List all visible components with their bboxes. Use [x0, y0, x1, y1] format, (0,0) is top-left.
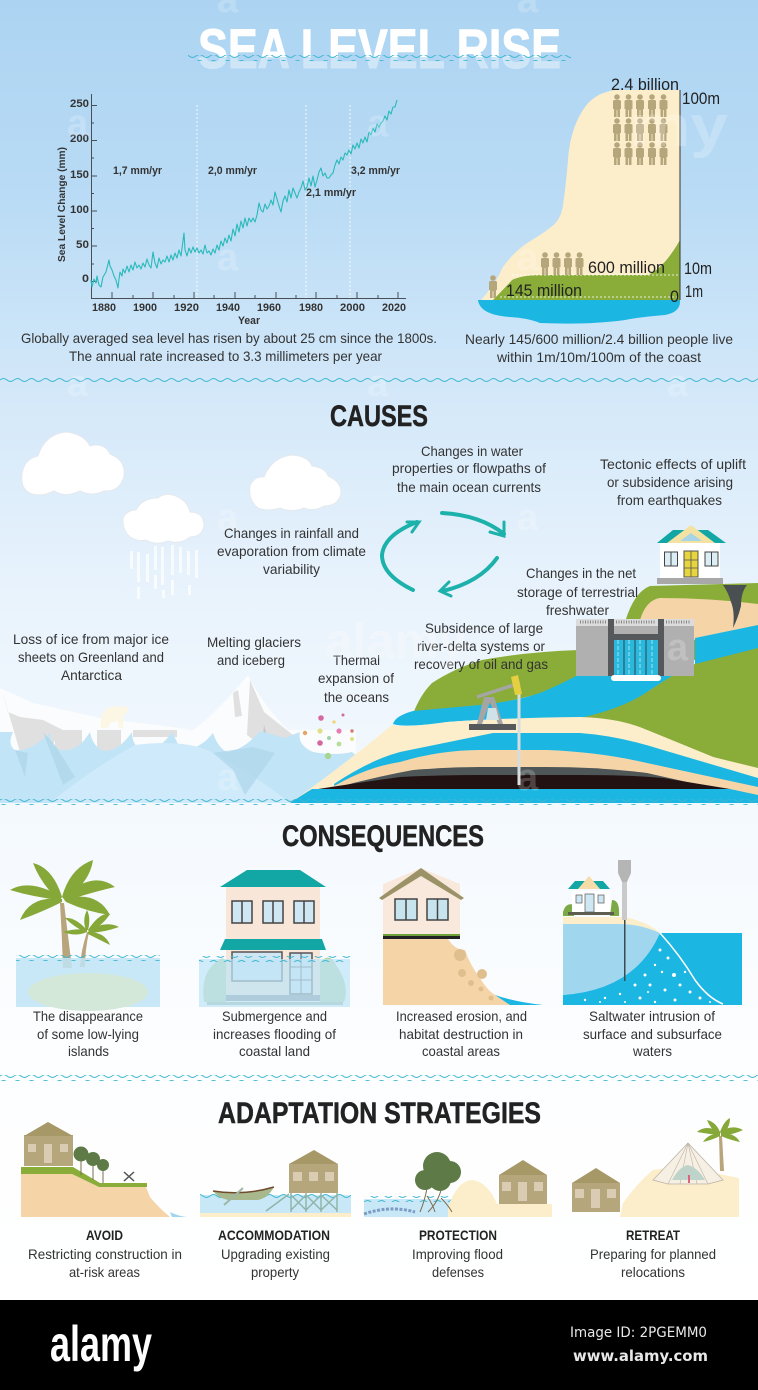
rate labels: 2,1 mm/yr [306, 187, 357, 199]
icon: palm trees [10, 860, 119, 968]
caption: saltwater: Saltwater intrusion of [589, 1008, 715, 1024]
grey ice faces [2, 680, 293, 754]
lower right land [580, 648, 758, 770]
population and height labels: 145 million [506, 281, 582, 300]
x axis labels: 1960 [257, 302, 281, 314]
y axis labels: 0 [82, 273, 89, 285]
rain [130, 545, 198, 599]
stilts [266, 1193, 337, 1212]
rate labels [113, 165, 401, 199]
title: SEA LEVEL RISE [198, 17, 561, 80]
y axis labels: 200 [70, 133, 89, 145]
thermal expansion particles [303, 714, 354, 759]
upper river [695, 625, 758, 668]
label: tectonic effects: from earthquakes [617, 492, 722, 508]
cloud 2 [123, 494, 204, 543]
label: glaciers [207, 634, 301, 668]
label: accommodation: Upgrading existing [221, 1246, 330, 1262]
watermarks: a [517, 237, 539, 279]
label: tectonic effects [600, 456, 746, 508]
y axis labels: 100 [70, 204, 89, 216]
caption: sea level: The annual rate increased to 3.3 millimeters per year [69, 348, 382, 364]
palm [719, 1136, 724, 1171]
label: protection: defenses [432, 1264, 484, 1280]
population and height labels: 100m [682, 89, 720, 108]
label: subsidence: Subsidence of large [425, 620, 543, 636]
population and height labels: 2.4 billion [611, 75, 679, 94]
earthquake crack [723, 585, 747, 628]
label: freshwater storage: Changes in the net [526, 565, 636, 581]
footer bar [0, 1300, 758, 1390]
rate labels: 2,0 mm/yr [208, 165, 258, 177]
mangrove [415, 1152, 461, 1191]
watermarks: a [367, 103, 389, 145]
caption: coastal population [465, 331, 733, 365]
panel: avoid [21, 1122, 187, 1217]
caption: erosion [396, 1008, 527, 1059]
heading: consequences: CONSEQUENCES [282, 820, 484, 853]
x axis labels: 2000 [340, 302, 365, 314]
elevation lines [500, 275, 680, 297]
lighter water sheet [50, 743, 290, 803]
label: rainfall: evaporation from climate [217, 543, 366, 559]
y axis labels [56, 98, 89, 285]
people icons: 600 million [541, 252, 584, 275]
panel: retreat [562, 1118, 743, 1217]
dam [576, 619, 694, 681]
label: freshwater storage: freshwater [546, 602, 609, 618]
watermarks: a [517, 497, 539, 539]
boat [213, 1187, 274, 1200]
rate labels: 1,7 mm/yr [113, 165, 163, 177]
land 10m zone [493, 240, 680, 300]
x axis labels: 1880 [92, 302, 116, 314]
heading: causes: CAUSES [330, 400, 428, 433]
people icon: 145 million [489, 275, 497, 298]
water [478, 300, 680, 324]
caption: islands: of some low-lying [37, 1026, 139, 1042]
watermarks: a [667, 627, 689, 669]
small house [563, 876, 619, 916]
watermarks [67, 0, 728, 799]
caption: sea level: Globally averaged sea level has risen by about 25 cm since the 1800s. [21, 330, 437, 346]
caption: erosion: Increased erosion, and [396, 1008, 527, 1024]
ice shelf [0, 688, 187, 733]
caption: flooding: coastal land [239, 1043, 310, 1059]
submerged ice [15, 732, 275, 795]
hill sand [640, 598, 758, 640]
x axis labels: Year [238, 315, 261, 327]
upper hill [625, 583, 758, 660]
population and height labels: 1m [685, 282, 703, 301]
x mark [124, 1172, 134, 1181]
watermarks: a [217, 757, 239, 799]
label: protection [412, 1227, 503, 1280]
label: ice sheets: Loss of ice from major ice [13, 631, 169, 647]
mountain [187, 675, 293, 735]
caption: erosion: habitat destruction in [399, 1026, 523, 1042]
river [393, 664, 695, 726]
watermarks: my [630, 94, 728, 159]
reef rocks [364, 1209, 415, 1214]
label: tectonic effects: Tectonic effects of uplift [600, 456, 746, 472]
line chart: sea level change [56, 94, 406, 327]
panel: saltwater intrusion [563, 860, 742, 1005]
x axis labels: 1980 [299, 302, 323, 314]
trees [74, 1146, 109, 1171]
y axis labels: Sea Level Change (mm) [56, 147, 68, 262]
caption: islands: The disappearance [33, 1008, 143, 1024]
house on hill [657, 525, 726, 584]
panel: islands [10, 860, 160, 1011]
caption: coastal population: Nearly 145/600 million/2.4 billion people live [465, 331, 733, 347]
population and height labels: 600 million [588, 258, 665, 277]
rate labels: 3,2 mm/yr [351, 165, 401, 177]
label: protection: Improving flood [412, 1246, 503, 1262]
watermarks: alamy [325, 613, 467, 669]
label: protection: PROTECTION [419, 1227, 497, 1243]
y axis labels: 150 [70, 169, 89, 181]
label: ice sheets: Antarctica [61, 667, 122, 683]
label: avoid: Restricting construction in [28, 1246, 182, 1262]
label: subsidence [414, 620, 548, 672]
label: glaciers: Melting glaciers [207, 634, 301, 650]
label: retreat: RETREAT [626, 1227, 680, 1243]
label: rainfall: variability [263, 561, 320, 577]
sea level series [91, 100, 397, 288]
sea [0, 731, 362, 803]
label: ocean currents [392, 443, 546, 495]
cycle arrows: ocean currents [382, 513, 504, 596]
label: retreat [590, 1227, 716, 1280]
salt particles [584, 948, 711, 1003]
panel: accommodation [200, 1150, 351, 1217]
panel: erosion [379, 868, 543, 1005]
clouds and rain [22, 432, 341, 599]
label: avoid: at-risk areas [69, 1264, 140, 1280]
watermarks: a [367, 363, 389, 405]
caption: flooding [213, 1008, 336, 1059]
foam behind waves [4, 730, 356, 756]
heading: adaptation strategies: ADAPTATION STRATEGIES [218, 1097, 541, 1130]
x axis labels: 1940 [216, 302, 240, 314]
x axis labels: 2020 [382, 302, 406, 314]
beach [563, 917, 660, 933]
caption: islands [33, 1008, 143, 1059]
people icons: 2.4 billion [613, 94, 668, 165]
land 100m zone [481, 90, 680, 300]
label: avoid [28, 1227, 182, 1280]
label: accommodation [218, 1227, 330, 1280]
label: thermal expansion: expansion of [318, 670, 394, 686]
watermarks: a [217, 237, 239, 279]
population and height labels: 0 [670, 287, 679, 306]
freshwater lens [563, 924, 660, 995]
alamy logo: alamy [50, 1316, 152, 1372]
label: ice sheets: sheets on Greenland and [18, 649, 164, 665]
y axis labels: 50 [76, 239, 89, 251]
label: ocean currents: properties or flowpaths of [392, 460, 546, 476]
label: ocean currents: Changes in water [421, 443, 523, 459]
interface line [660, 933, 723, 1004]
coastal cross-section [290, 525, 758, 803]
watermarks: a [217, 497, 239, 539]
caption: saltwater: waters [632, 1043, 672, 1059]
label: retreat: Preparing for planned [590, 1246, 716, 1262]
label: avoid: AVOID [86, 1227, 123, 1243]
caption: saltwater [583, 1008, 722, 1059]
label: subsidence: recovery of oil and gas [414, 656, 548, 672]
y axis labels: 250 [70, 98, 89, 110]
population and height labels [506, 75, 720, 306]
tent [653, 1143, 723, 1184]
label: thermal expansion [318, 652, 394, 705]
label: tectonic effects: or subsidence arising [607, 474, 733, 490]
watermarks: a [667, 363, 689, 405]
label: thermal expansion: Thermal [333, 652, 380, 668]
label: rainfall [217, 525, 366, 577]
water [16, 958, 160, 1007]
label: ocean currents: the main ocean currents [397, 479, 541, 495]
upper storey [226, 887, 320, 995]
title [188, 28, 571, 69]
axes [91, 94, 406, 298]
caption: sea level [21, 330, 437, 364]
well [618, 860, 631, 981]
label: accommodation: ACCOMMODATION [218, 1227, 330, 1243]
label: rainfall: Changes in rainfall and [224, 525, 359, 541]
panel: protection [364, 1152, 552, 1217]
label: glaciers: and iceberg [217, 652, 285, 668]
cloud 3 [250, 455, 341, 510]
x axis labels [92, 302, 406, 327]
label: subsidence: river-delta systems or [417, 638, 545, 654]
caption: islands: islands [68, 1043, 109, 1059]
left green hill [413, 650, 578, 714]
panel: flooded house [199, 870, 350, 1007]
title: SEA LEVEL RISE [198, 17, 561, 80]
label: retreat: relocations [621, 1264, 685, 1280]
image id: Image ID: 2PGEMM0 [570, 1325, 707, 1341]
caption: coastal population: within 1m/10m/100m of the coast [496, 349, 701, 365]
coastal population diagram [478, 75, 720, 324]
label: accommodation: property [251, 1264, 299, 1280]
caption: flooding: Submergence and [222, 1008, 327, 1024]
label: thermal expansion: the oceans [324, 689, 389, 705]
saltwater [563, 933, 742, 1005]
label: freshwater storage [517, 565, 638, 618]
caption: flooding: increases flooding of [213, 1026, 336, 1042]
flood water [199, 959, 350, 1007]
watermarks: a [517, 757, 539, 799]
period dividers [197, 105, 350, 298]
population and height labels: 10m [684, 259, 712, 278]
label: freshwater storage: storage of terrestrial [517, 584, 638, 600]
x axis labels: 1900 [133, 302, 157, 314]
polar bear [101, 706, 128, 728]
ground floor [232, 952, 282, 981]
watermarks: a [67, 103, 89, 145]
website: www.alamy.com [573, 1347, 708, 1365]
causes labels [13, 443, 746, 705]
cloud 1 [22, 432, 124, 495]
oil pump [469, 675, 522, 785]
caption: erosion: coastal areas [422, 1043, 500, 1059]
x axis labels: 1920 [174, 302, 199, 314]
geological layers [290, 717, 758, 803]
ice shelf, mountain and ocean [0, 675, 362, 803]
caption: saltwater: surface and subsurface [583, 1026, 722, 1042]
watermarks: a [67, 363, 89, 405]
falling rocks [454, 949, 494, 1000]
label: ice sheets [13, 631, 169, 683]
